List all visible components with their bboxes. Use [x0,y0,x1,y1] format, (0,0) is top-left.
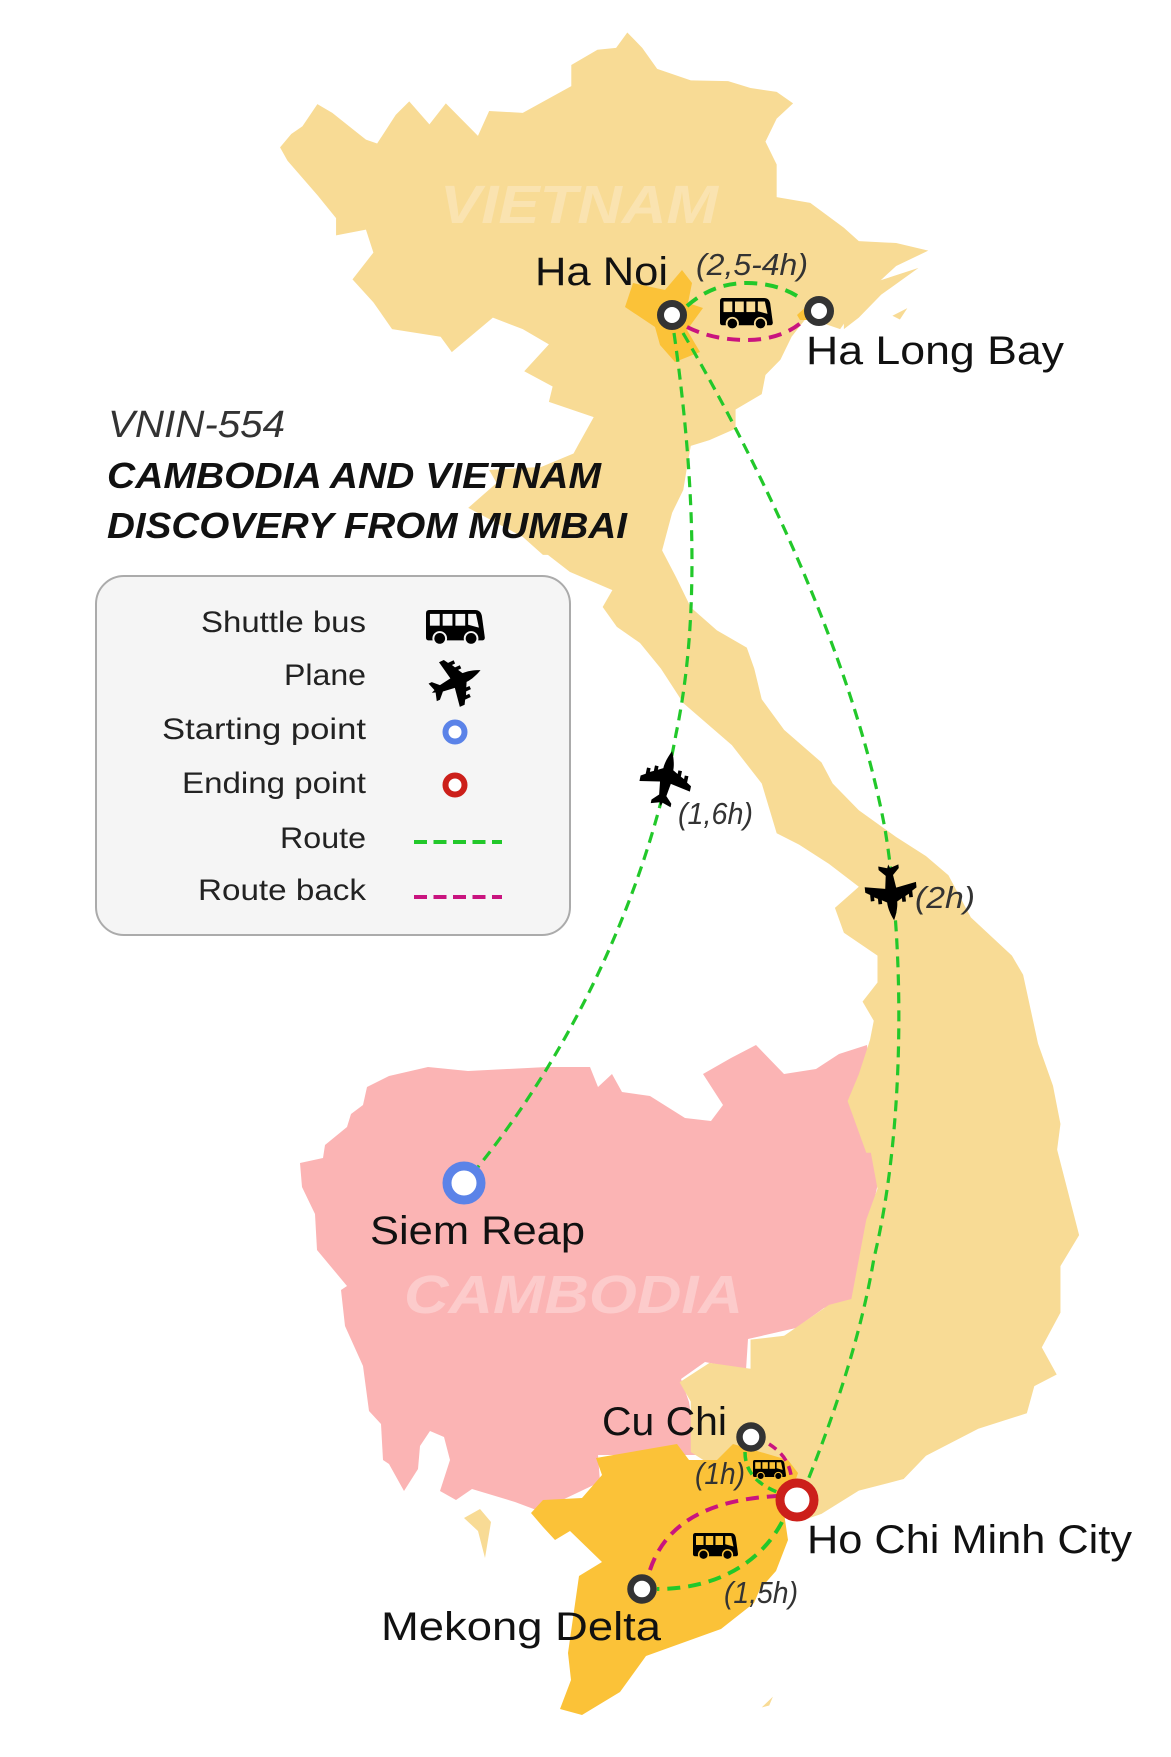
legend: route label: Route [280,822,366,855]
legend: route back line [414,895,502,899]
marker: Ha Noi [660,304,684,326]
route: Ho Chi Minh City to Cu Chi [745,1452,777,1492]
legend: plane label: Plane [284,659,366,692]
label: VIETNAM: VIETNAM [440,175,719,235]
route back: Mekong Delta to Ho Chi Minh City [650,1496,777,1570]
duration: plane to Siem Reap: (1,6h) [678,796,753,831]
marker: Cu Chi [740,1426,762,1448]
legend: ending point marker [446,776,464,794]
label: Ha Noi: Ha Noi [535,250,668,294]
map: Mekong Delta region [531,1444,798,1715]
route: Ho Chi Minh City to Mekong Delta [657,1522,782,1589]
route: Ha Noi to Siem Reap [478,333,692,1167]
duration: Ha Noi to Ha Long: (2,5-4h) [696,247,808,282]
duration: Cu Chi: (1h) [695,1456,745,1491]
marker: Mekong Delta [630,1578,654,1600]
label: Ho Chi Minh City: Ho Chi Minh City [807,1518,1132,1562]
icon: bus Mekong Delta [693,1533,738,1560]
title line 1: CAMBODIA AND VIETNAM [107,455,602,496]
map: Con Dao island [762,1697,773,1707]
marker: Ha Long Bay [808,300,830,322]
map: Ha Noi region [625,270,703,362]
legend: starting point marker [446,722,464,742]
label: CAMBODIA: CAMBODIA [404,1265,743,1325]
icon: plane to Ho Chi Minh City [863,862,920,923]
legend panel [96,576,570,935]
duration: Mekong Delta: (1,5h) [724,1575,798,1610]
duration: plane to Ho Chi Minh City: (2h) [915,880,975,915]
route back: Cu Chi to Ho Chi Minh City [769,1444,792,1481]
title block [107,404,628,546]
icon: plane to Siem Reap [635,746,697,811]
legend: bus icon [426,610,485,646]
tour code: VNIN-554 [108,404,285,446]
marker: Ho Chi Minh City [780,1483,814,1517]
icon: bus Cu Chi [753,1460,786,1480]
legend: shuttle bus label: Shuttle bus [201,606,366,639]
map: Ha Long Bay region [797,305,815,320]
legend: ending point label: Ending point [182,767,367,800]
route back: Ha Long Bay to Ha Noi [687,321,803,340]
marker: Siem Reap [447,1166,481,1200]
legend: route line [414,840,502,844]
route: Ha Noi to Ha Long Bay [687,283,803,306]
legend: route back label: Route back [198,874,367,907]
title line 2: DISCOVERY FROM MUMBAI [107,505,628,546]
label: Cu Chi: Cu Chi [602,1400,727,1444]
map: Cambodia [300,1045,879,1511]
legend: plane icon [421,648,491,715]
icon: bus Ha Noi to Ha Long [720,298,773,330]
map: Vietnam [280,33,1079,1558]
legend: starting point label: Starting point [162,713,367,746]
label: Siem Reap: Siem Reap [370,1209,585,1253]
label: Mekong Delta: Mekong Delta [381,1605,662,1649]
label: Ha Long Bay: Ha Long Bay [806,329,1064,373]
route: Ha Noi to Ho Chi Minh City [683,333,899,1480]
